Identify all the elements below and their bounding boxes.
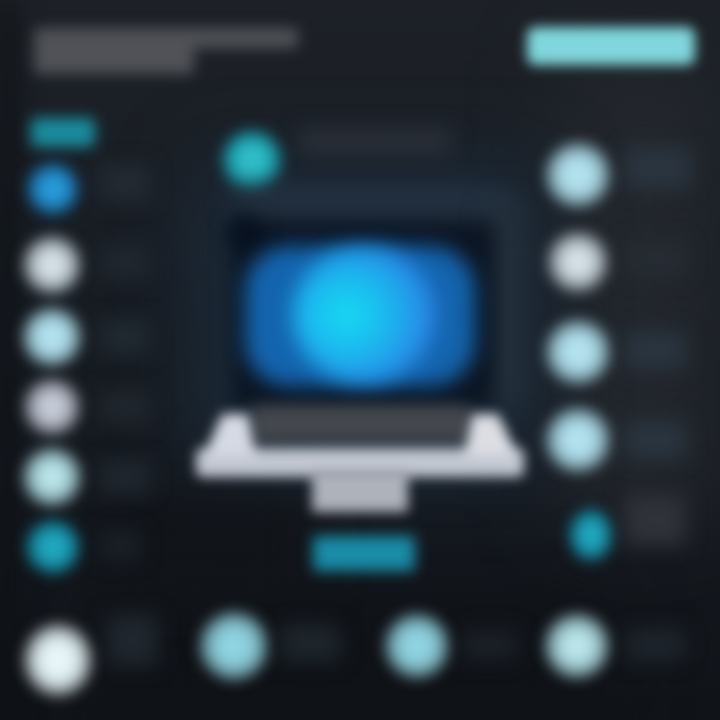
panel: bottom row bbox=[24, 612, 685, 696]
panel: left column bbox=[23, 163, 150, 574]
center top icon bbox=[222, 130, 282, 190]
left item 4 bbox=[24, 379, 150, 435]
right item 5 bbox=[569, 495, 685, 561]
left item 6 bbox=[26, 520, 140, 574]
bottom item 4 bbox=[545, 614, 685, 678]
left item 5 bbox=[23, 448, 150, 506]
bottom item 1 bbox=[24, 615, 158, 696]
right item 2 bbox=[548, 232, 685, 292]
right item 4 bbox=[546, 408, 685, 472]
screen dark corner bbox=[229, 216, 261, 248]
bottom item 3 bbox=[385, 614, 517, 678]
laptop lid right edge bbox=[492, 205, 518, 405]
laptop stand bbox=[312, 470, 408, 512]
left item 3 bbox=[23, 308, 150, 366]
laptop base bbox=[196, 414, 524, 477]
laptop screen bbox=[232, 222, 494, 407]
laptop lid top edge bbox=[235, 192, 515, 212]
top right button bbox=[527, 27, 695, 65]
center heading text bbox=[300, 128, 450, 154]
bottom item 2 bbox=[200, 612, 340, 680]
screen cyan orb bbox=[292, 247, 436, 383]
panel: right column bbox=[546, 143, 690, 561]
right item 3 bbox=[546, 320, 685, 384]
left item 2 bbox=[23, 236, 150, 294]
left column heading pill bbox=[31, 118, 95, 147]
laptop keyboard bbox=[252, 406, 470, 442]
screen blue glow bbox=[245, 246, 475, 386]
right item 1 bbox=[546, 143, 690, 207]
center bottom button bbox=[313, 536, 415, 571]
left item 1 bbox=[27, 163, 150, 215]
laptop bbox=[196, 192, 524, 512]
title block bbox=[34, 28, 298, 74]
